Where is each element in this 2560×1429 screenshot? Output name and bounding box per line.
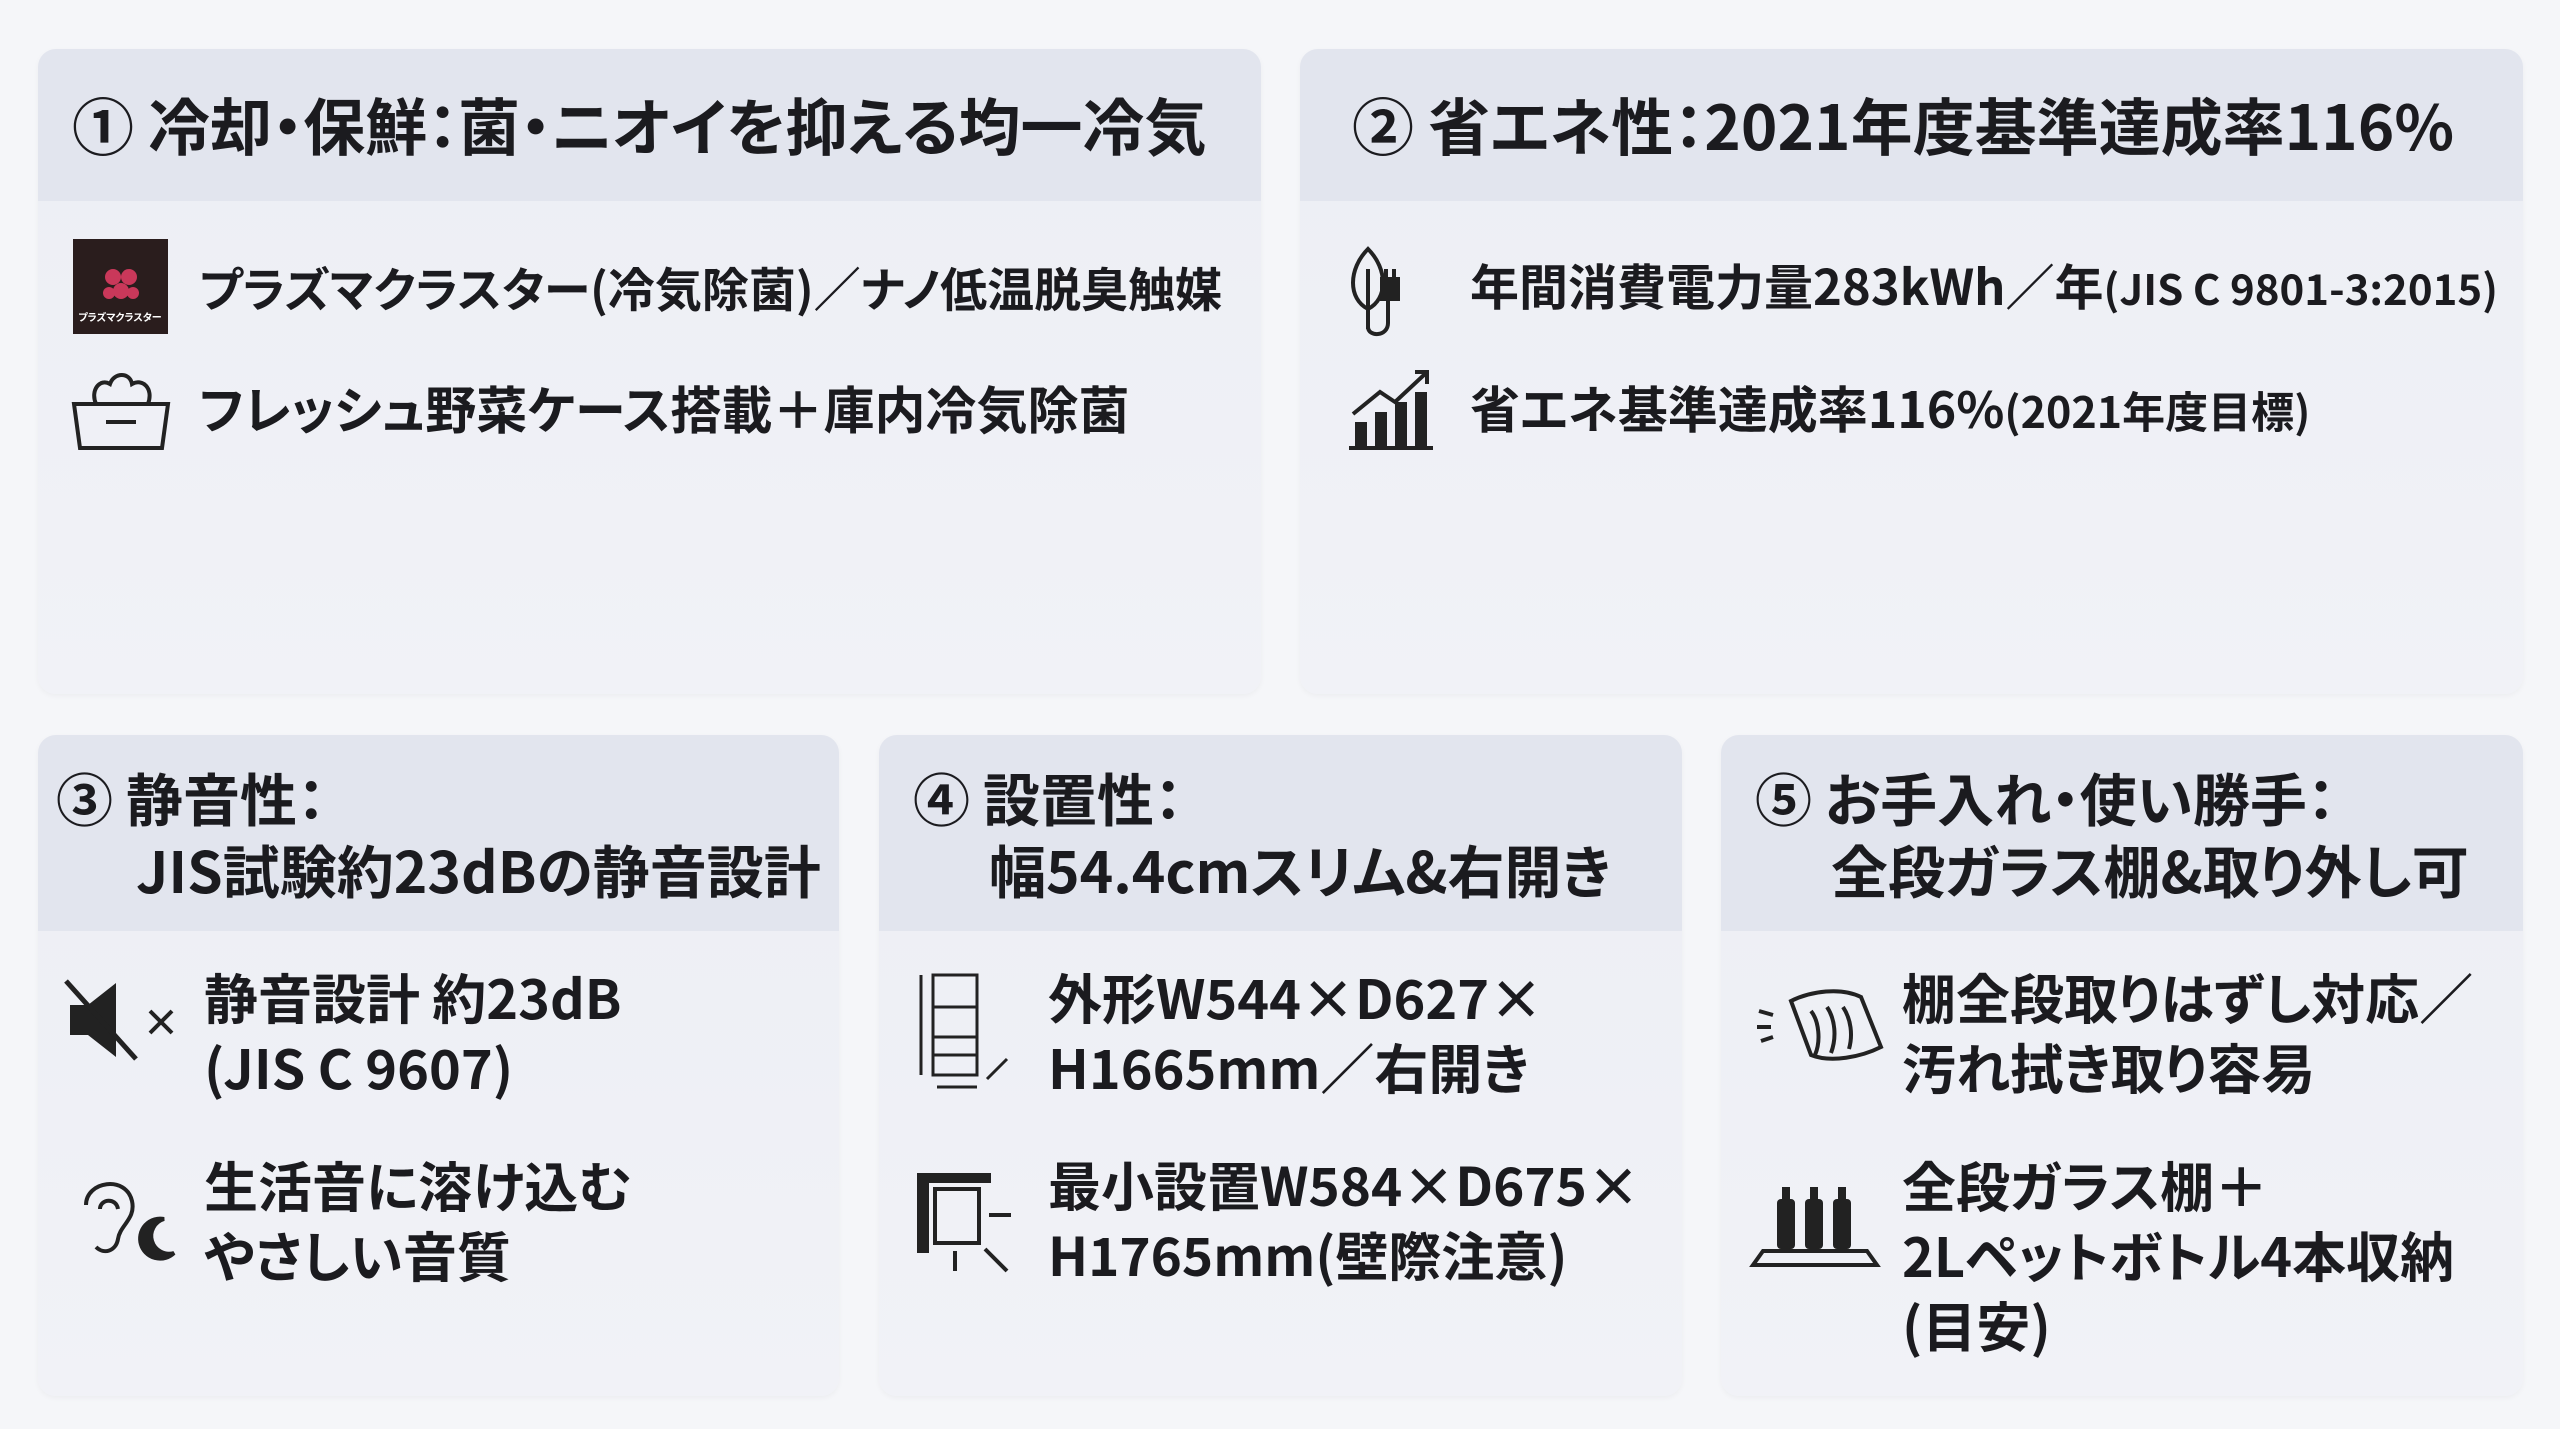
heading: quietness <box>38 735 839 931</box>
icon: wall clearance <box>917 1173 1011 1272</box>
text: minimum installation <box>1048 1146 1640 1292</box>
text: dimensions: 外形W544×D627× <box>1048 956 1543 1035</box>
heading: maintenance: 全段ガラス棚&取り外し可 <box>1831 828 2469 910</box>
text: minimum installation: 最小設置W584×D675× <box>1048 1146 1640 1222</box>
heading: maintenance <box>1721 735 2523 931</box>
text: glass shelves: (目安) <box>1902 1284 2051 1363</box>
text: gentle sound: やさしい音質 <box>204 1214 511 1293</box>
icon: ear moon <box>84 1182 176 1261</box>
heading: installation: ④ 設置性： <box>913 756 1182 838</box>
heading: installation <box>879 735 1682 931</box>
icon: fridge dimensions <box>920 974 1008 1088</box>
text: dimensions <box>1048 956 1543 1105</box>
heading: energy: ② 省エネ性：2021年度基準達成率116% <box>1352 78 2454 168</box>
icon: plasmacluster: プラズマクラスター <box>78 309 162 324</box>
text: achievement: 省エネ基準達成率116%(2021年度目標) <box>1470 371 2310 443</box>
text: quiet design: (JIS C 9607) <box>204 1026 513 1105</box>
text: removable shelves: 汚れ拭き取り容易 <box>1902 1026 2315 1105</box>
icon: bottles on shelf <box>1749 1187 1881 1267</box>
icon: vegetable case <box>72 373 170 450</box>
text: gentle sound <box>204 1144 632 1293</box>
icon: plasmacluster <box>73 239 168 334</box>
text: minimum installation: H1765mm(壁際注意) <box>1048 1216 1567 1292</box>
icon: wiping hand <box>1757 989 1884 1061</box>
text: quiet design: 静音設計 約23dB <box>204 956 622 1035</box>
text: glass shelves: 全段ガラス棚＋ <box>1902 1144 2268 1223</box>
text: gentle sound: 生活音に溶け込む <box>204 1144 632 1223</box>
text: dimensions: H1665mm／右開き <box>1048 1026 1529 1105</box>
text: plasmacluster: プラズマクラスター(冷気除菌)／ナノ低温脱臭触媒 <box>199 252 1222 321</box>
text: removable shelves: 棚全段取りはずし対応／ <box>1902 956 2473 1035</box>
heading: quietness: JIS試験約23dBの静音設計 <box>136 828 821 910</box>
panel: energy <box>1300 49 2523 694</box>
panel: installation <box>879 735 1682 1396</box>
text: quiet design <box>204 956 622 1105</box>
text: removable shelves <box>1902 956 2473 1105</box>
heading: cooling <box>38 49 1261 201</box>
heading: maintenance: ⑤ お手入れ・使い勝手： <box>1755 756 2335 838</box>
icon: bar chart <box>1349 370 1433 450</box>
heading: energy <box>1300 49 2523 201</box>
heading: quietness: ③ 静音性： <box>56 756 325 838</box>
text: glass shelves: 2Lペットボトル4本収納 <box>1902 1214 2454 1293</box>
panel: quietness <box>38 735 839 1396</box>
heading: cooling: ① 冷却・保鮮：菌・ニオイを抑える均一冷気 <box>72 78 1207 168</box>
text: fresh vegetable case: フレッシュ野菜ケース搭載＋庫内冷気除菌 <box>199 370 1130 444</box>
icon: leaf plug <box>1351 246 1400 336</box>
panel: cooling <box>38 49 1261 694</box>
heading: installation: 幅54.4cmスリム&右開き <box>989 828 1611 910</box>
panel: maintenance <box>1721 735 2523 1396</box>
icon: muted speaker <box>64 979 174 1061</box>
text: annual consumption: 年間消費電力量283kWh／年(JIS C 9801-3:2015) <box>1470 249 2498 320</box>
text: glass shelves <box>1902 1144 2454 1363</box>
